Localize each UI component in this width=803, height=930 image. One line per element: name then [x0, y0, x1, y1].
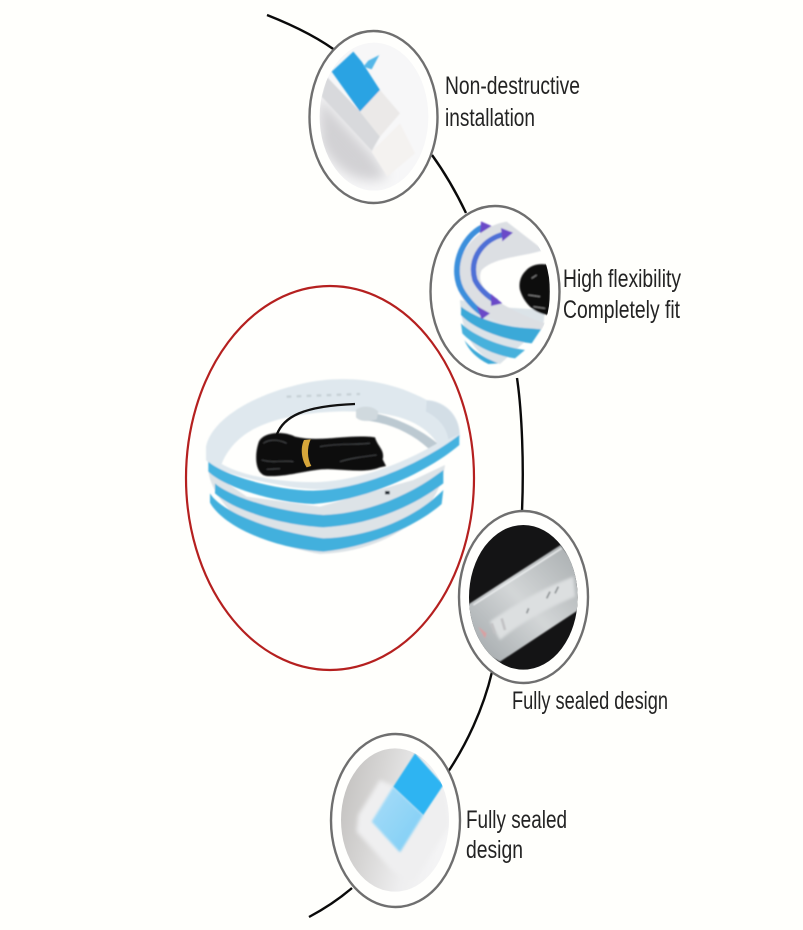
circle frame 3	[459, 511, 588, 683]
black cable	[256, 404, 386, 476]
label: Non-destructive installation	[445, 72, 580, 132]
grey top band	[457, 222, 545, 329]
lower strip layers	[208, 465, 445, 554]
yellow band	[302, 439, 311, 467]
label: Fully sealed design: design	[466, 836, 523, 864]
main product circle	[186, 286, 474, 670]
label: High flexibility Completely fit: Completely fit	[563, 296, 680, 324]
label: Fully sealed design	[466, 806, 567, 864]
LED dots	[287, 394, 360, 397]
detail image 3	[469, 525, 578, 670]
circle frame 1	[310, 31, 438, 203]
feature 1: non-destructive installation	[310, 31, 580, 203]
feature 4: fully sealed design	[331, 734, 567, 907]
feature 2: high flexibility	[430, 206, 681, 377]
detail image 2	[457, 221, 550, 364]
black cable	[520, 264, 550, 315]
circle frame 2	[430, 206, 560, 377]
blue band 1	[208, 435, 459, 504]
label: Non-destructive installation: Non-destructive	[445, 72, 580, 100]
detail image 1	[320, 50, 416, 190]
blue band 2	[215, 470, 443, 527]
strip body	[460, 300, 545, 364]
label: High flexibility Completely fit: High flexibility	[563, 265, 681, 293]
detail image 4	[341, 748, 449, 892]
red outline ellipse	[186, 286, 474, 670]
label: Fully sealed design: Fully sealed design	[512, 687, 668, 715]
inner arrow	[474, 234, 505, 302]
outer arrow	[457, 227, 485, 315]
label: High flexibility Completely fit	[563, 265, 681, 324]
infographic canvas	[184, 14, 681, 918]
connecting arc	[267, 15, 523, 917]
label: Non-destructive installation: installation	[445, 104, 535, 132]
LED strip coil	[206, 379, 460, 554]
small hole	[385, 491, 390, 494]
plug	[356, 407, 378, 421]
blue band 3	[210, 490, 443, 552]
circle frame 4	[331, 734, 460, 907]
label: Fully sealed design: Fully sealed	[466, 806, 567, 834]
feature 3: fully sealed design	[459, 511, 668, 715]
translucent top ring	[206, 379, 460, 489]
